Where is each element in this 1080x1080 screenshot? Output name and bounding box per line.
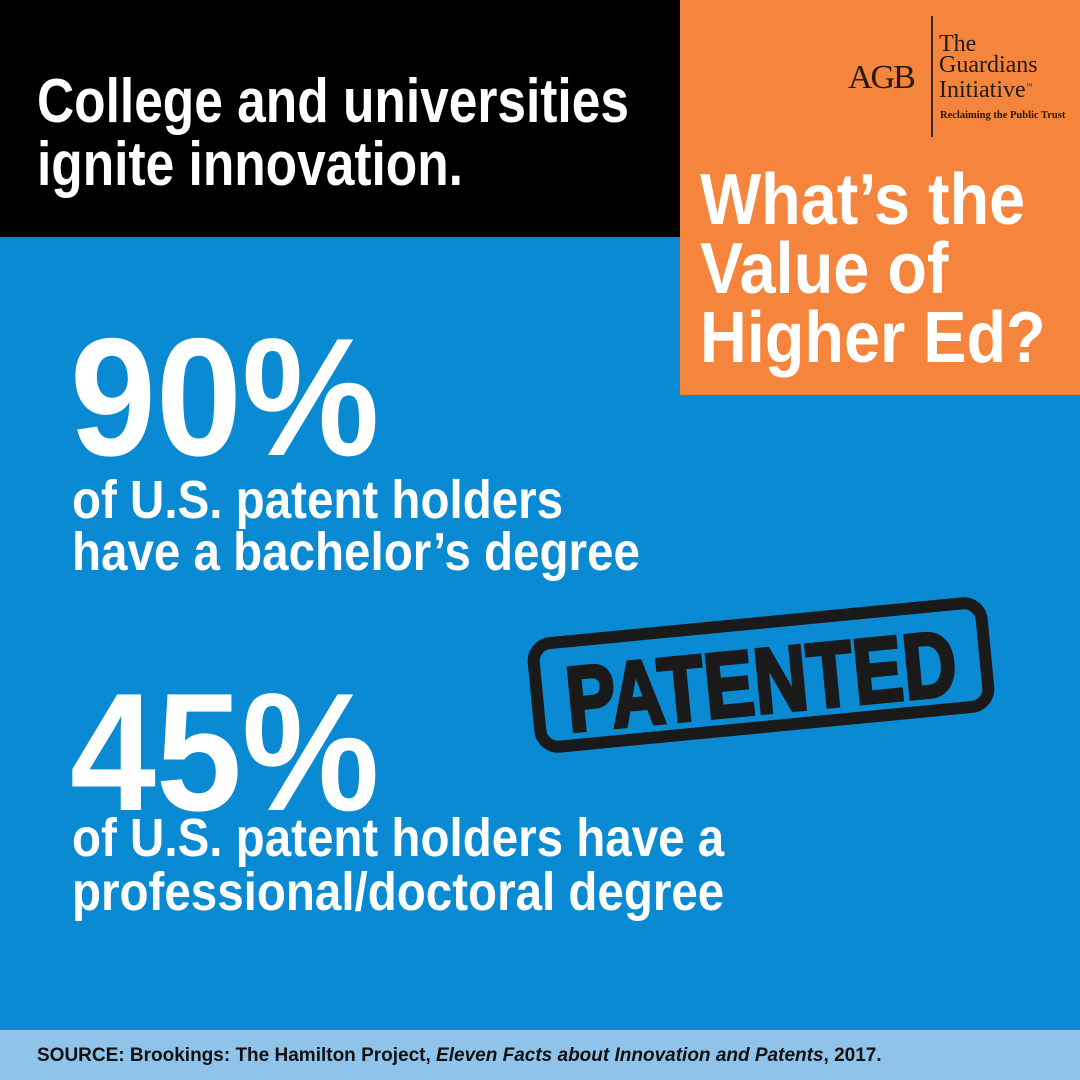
title: What's the Value of Higher Ed?: What’s the: [700, 160, 1025, 240]
logo: [848, 16, 1066, 137]
icon: patented stamp: PATENTED: [562, 612, 962, 751]
logo: Reclaiming the Public Trust: [940, 110, 1065, 121]
text: 90% description: have a bachelor’s degree: [72, 522, 640, 582]
title: What's the Value of Higher Ed?: [700, 160, 1046, 378]
text: 90% description: [72, 470, 640, 582]
text: 90% description: of U.S. patent holders: [72, 470, 563, 530]
text: 45% description: professional/doctoral degree: [72, 862, 724, 922]
logo: AGB: [848, 59, 914, 96]
heading: College and universities: [37, 67, 629, 136]
title: What's the Value of Higher Ed?: Value of: [700, 229, 948, 309]
footer: source: SOURCE: Brookings: The Hamilton Project, Eleven Facts about Innovation and Patents, 2017.: [37, 1045, 882, 1066]
text: 45% description: of U.S. patent holders have a: [72, 808, 724, 868]
heading: ignite innovation.: [37, 130, 463, 199]
panel: orange title: [680, 0, 1080, 395]
title: What's the Value of Higher Ed?: Higher Ed?: [700, 298, 1046, 378]
panel: black header: [0, 0, 680, 237]
text: 45% description: [72, 808, 724, 922]
stat: 45%: 45%: [70, 658, 379, 846]
stat: 90%: 90%: [70, 303, 379, 491]
logo: Guardians: [939, 52, 1038, 78]
logo: The: [939, 31, 976, 57]
footer: source: [0, 1030, 1080, 1080]
heading: [37, 67, 629, 199]
logo: Initiative™: [939, 77, 1033, 103]
